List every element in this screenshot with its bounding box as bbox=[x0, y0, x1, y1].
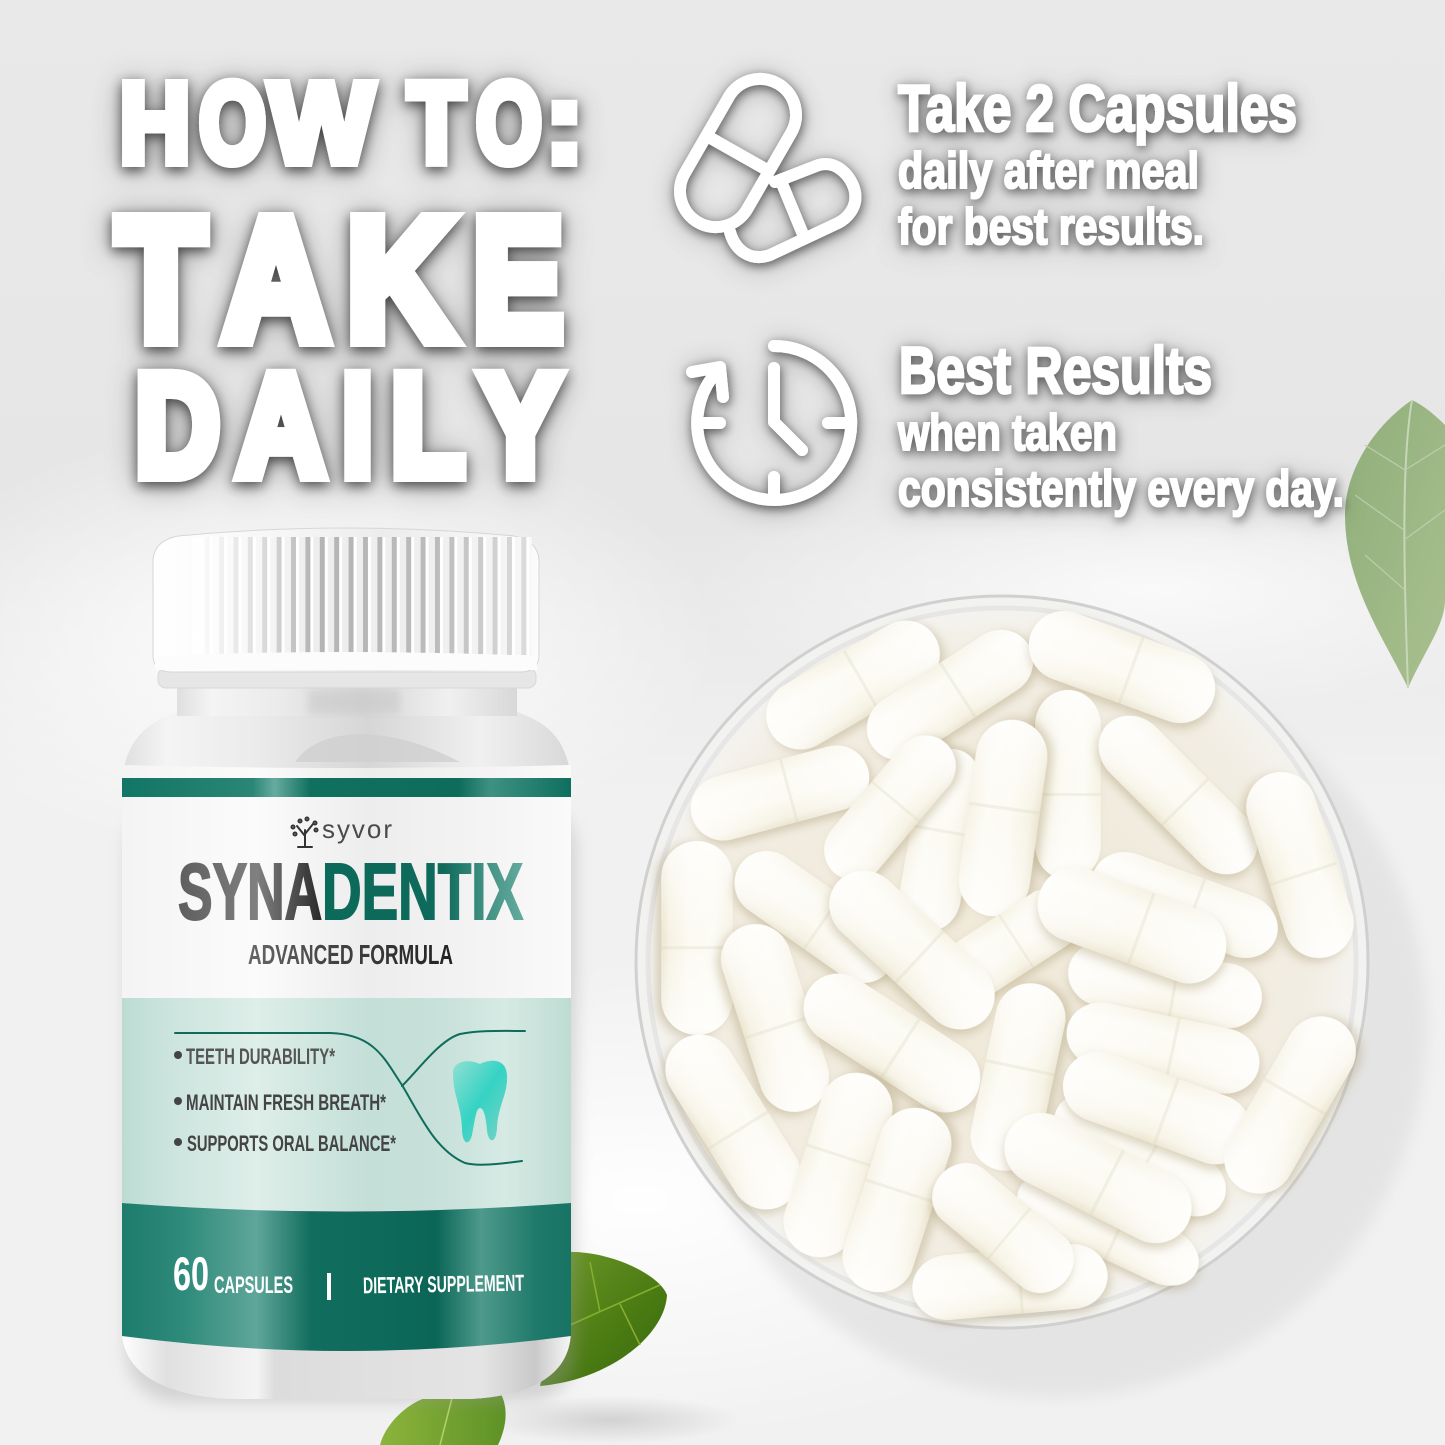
title: L bbox=[391, 345, 464, 506]
title: T bbox=[117, 182, 205, 376]
brand logo bbox=[292, 814, 392, 847]
bottle bbox=[122, 528, 571, 1399]
title: O bbox=[199, 60, 266, 186]
title: W bbox=[269, 60, 374, 186]
results text: when taken bbox=[897, 404, 1117, 461]
benefit list: TEETH DURABILITY* bbox=[186, 1044, 335, 1069]
product name: SYNA bbox=[178, 847, 322, 936]
bowl shadow bbox=[683, 653, 1427, 1397]
dosage text bbox=[898, 71, 1297, 255]
dosage text: for best results. bbox=[898, 198, 1204, 255]
leaf: bottle bottom bbox=[380, 1392, 506, 1445]
icon: tree bbox=[292, 818, 318, 847]
bottle neck bbox=[158, 668, 536, 762]
title: A bbox=[223, 182, 329, 376]
capsule count: 60 bbox=[173, 1247, 209, 1300]
benefit list: MAINTAIN FRESH BREATH* bbox=[186, 1090, 386, 1115]
capsules bbox=[652, 601, 1369, 1323]
bottle shadow bbox=[126, 800, 576, 1402]
capsule count bbox=[173, 1247, 293, 1300]
leaf: bottle right bbox=[540, 1252, 667, 1386]
bottle cap bbox=[153, 528, 539, 672]
title: H bbox=[120, 60, 190, 186]
icon: tooth bbox=[453, 1061, 507, 1142]
title: K bbox=[347, 182, 454, 376]
leaf: top right bbox=[1345, 400, 1445, 688]
benefit list: SUPPORTS ORAL BALANCE* bbox=[187, 1131, 396, 1156]
label: green panel bbox=[122, 1203, 571, 1351]
title: T bbox=[408, 60, 465, 186]
glass bowl with capsules bbox=[636, 596, 1369, 1328]
label: white panel bbox=[122, 765, 571, 1000]
title: D bbox=[136, 345, 220, 506]
icon: capsules bbox=[667, 66, 855, 257]
title: E bbox=[473, 182, 563, 376]
title: O bbox=[476, 60, 542, 186]
glass bowl bbox=[636, 596, 1368, 1328]
leaf shadow bbox=[480, 1396, 740, 1444]
product name: DENTIX bbox=[322, 847, 523, 936]
results text bbox=[897, 333, 1344, 517]
capsule count: CAPSULES bbox=[214, 1272, 293, 1299]
bottle base bbox=[122, 1330, 571, 1399]
subtitle: ADVANCED FORMULA bbox=[248, 939, 453, 970]
decorative wave bbox=[175, 1031, 525, 1165]
label: mint panel bbox=[122, 998, 571, 1210]
benefit list bbox=[174, 1044, 396, 1156]
results text: consistently every day. bbox=[898, 460, 1344, 517]
dosage text: daily after meal bbox=[898, 142, 1199, 199]
title bbox=[117, 60, 583, 506]
title: : bbox=[546, 60, 583, 186]
title: A bbox=[237, 345, 325, 506]
title: I bbox=[342, 345, 373, 506]
results text: Best Results bbox=[899, 333, 1212, 407]
icon: clock with arrow bbox=[692, 346, 851, 500]
dosage text: Take 2 Capsules bbox=[898, 71, 1297, 145]
product name bbox=[178, 847, 523, 936]
brand logo: syvor bbox=[322, 814, 392, 844]
supplement type: DIETARY SUPPLEMENT bbox=[363, 1270, 524, 1298]
bottle body bbox=[122, 712, 571, 1399]
title: Y bbox=[480, 345, 561, 506]
